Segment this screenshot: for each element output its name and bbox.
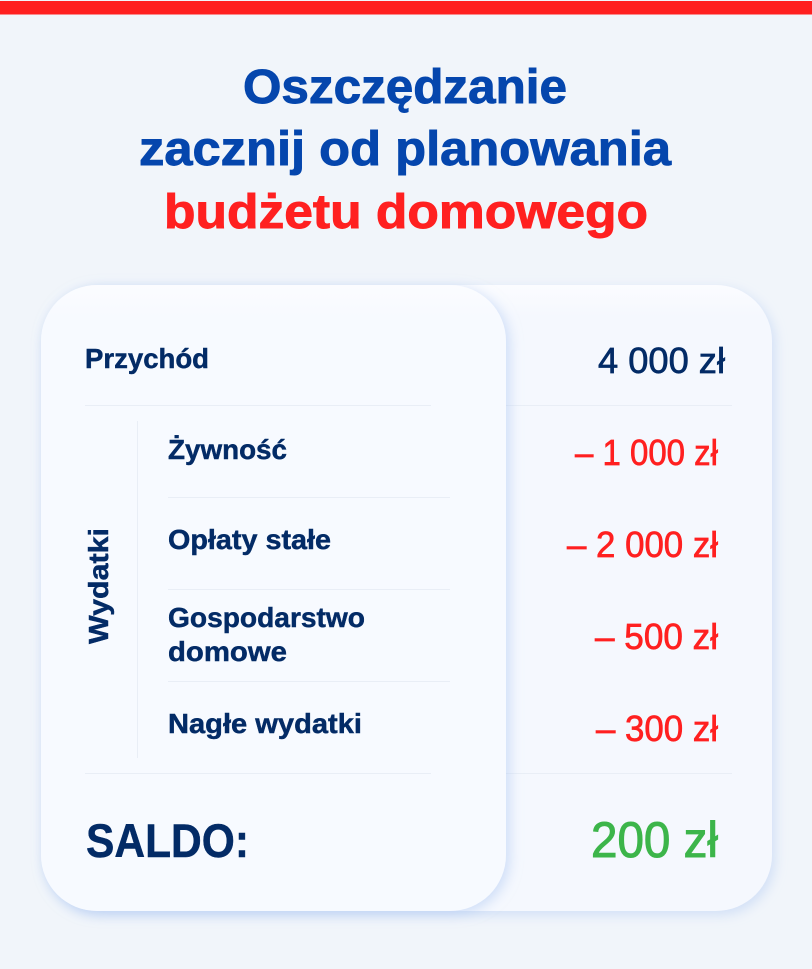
label: fixed fees: Opłaty stałe [168,524,331,555]
label: food: Żywność [168,434,287,465]
label: emergencies: Nagłe wydatki [168,708,362,739]
panel: amounts card [41,285,772,911]
balance label: SALDO: [86,814,249,867]
income amount: 4 000 zł [598,340,725,381]
title: zacznij od planowania [139,123,671,176]
expense amount: emergencies: – 300 zł [596,708,718,749]
panel: labels card [41,285,506,911]
title: Oszczędzanie [243,61,567,114]
expense amount: fixed fees: – 2 000 zł [567,524,718,565]
label: household [168,602,365,667]
expenses vertical label: Wydatki [83,528,114,644]
title [139,61,671,239]
expense amount: food: – 1 000 zł [575,432,718,473]
title: budżetu domowego [164,186,648,239]
top red bar [0,1,812,14]
balance amount: 200 zł [591,812,718,868]
label: household: domowe [168,636,287,667]
expense amount: household: – 500 zł [595,616,718,657]
label: household: Gospodarstwo [168,602,365,633]
income label: Przychód [85,343,209,374]
